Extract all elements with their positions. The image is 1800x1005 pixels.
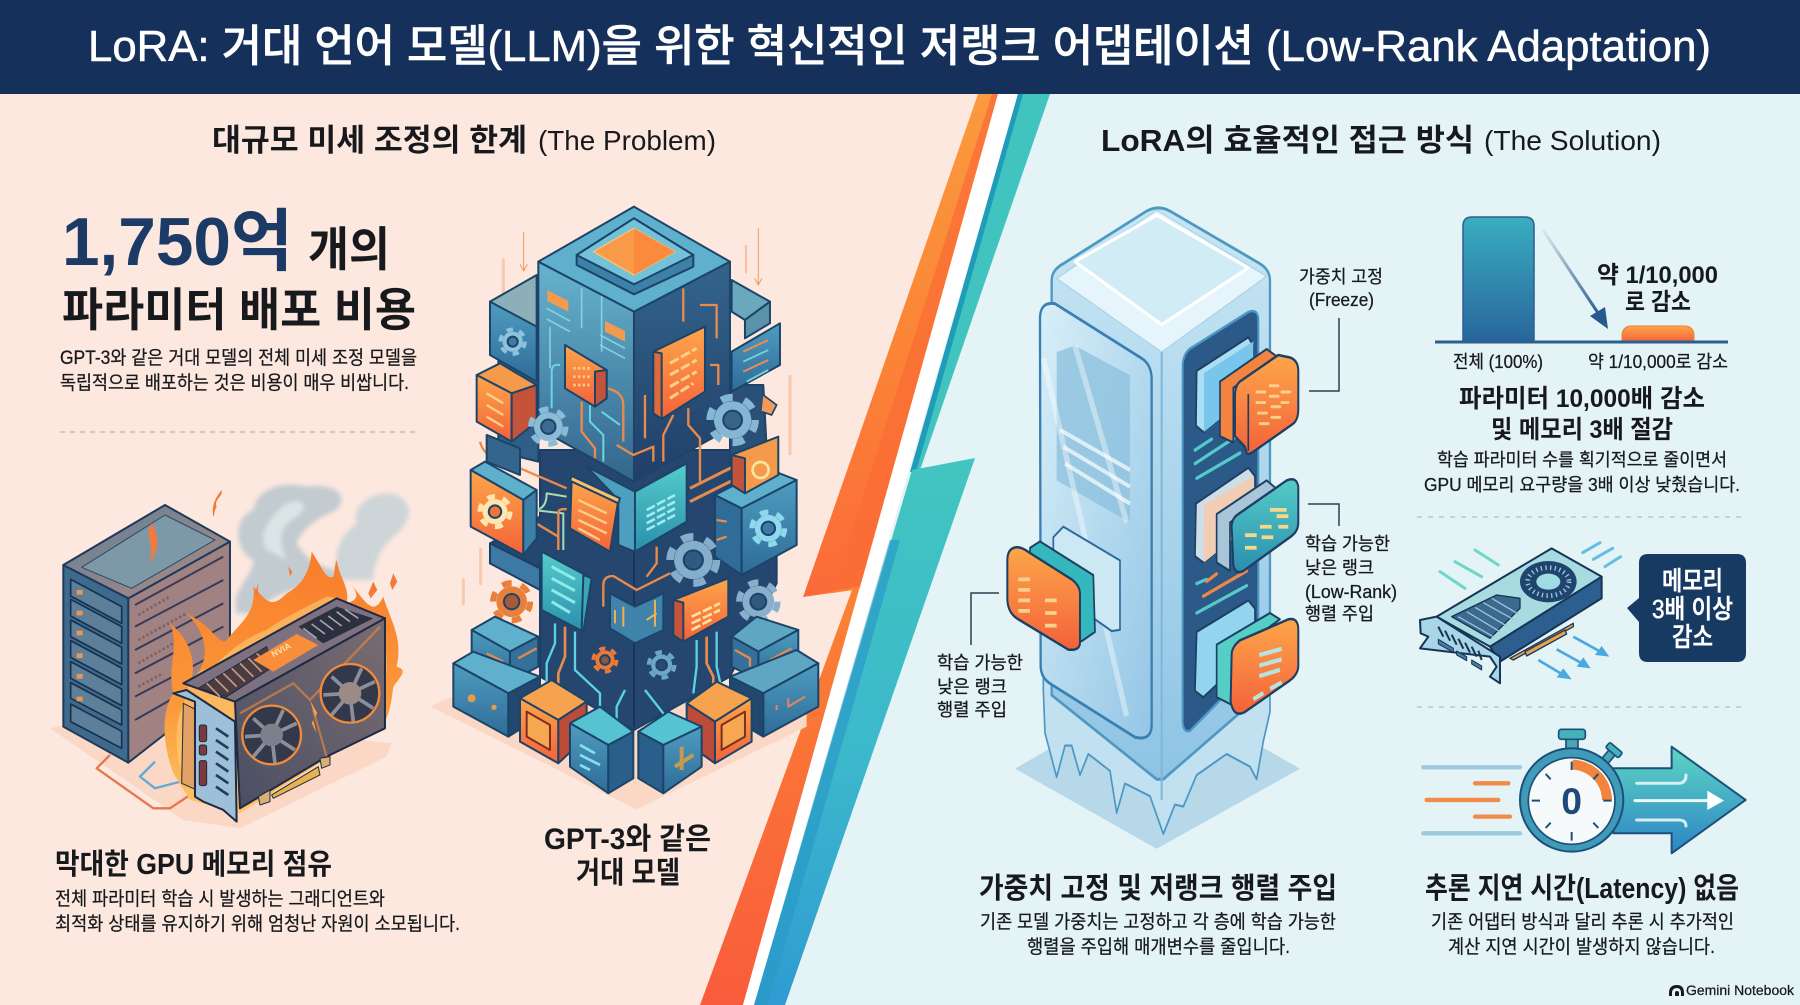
labels with leader lines: freeze and low-rank: 행렬 주입 bbox=[937, 700, 1007, 720]
text: parameter and memory reduction bbox=[1424, 385, 1740, 495]
labels with leader lines: freeze and low-rank: (Low-Rank) bbox=[1305, 582, 1397, 602]
text: weight freezing and low-rank injection: 가중치 고정 및 저랭크 행렬 주입 bbox=[979, 872, 1337, 905]
text: no inference latency bbox=[1425, 872, 1739, 958]
labels with leader lines: freeze and low-rank: 낮은 랭크 bbox=[1305, 558, 1374, 578]
text: parameter and memory reduction: GPU 메모리 요구량을 3배 이상 낮췄습니다. bbox=[1424, 475, 1740, 495]
text: GPU memory occupation bbox=[55, 848, 460, 935]
heading: solution: (The Solution) bbox=[1484, 125, 1661, 156]
labels with leader lines: freeze and low-rank bbox=[937, 267, 1397, 720]
watermark: Gemini Notebook: Gemini Notebook bbox=[1686, 982, 1795, 998]
icon: giant model tower bbox=[430, 207, 818, 809]
text: weight freezing and low-rank injection bbox=[979, 872, 1337, 958]
big number stat: 개의 bbox=[308, 223, 390, 276]
icon: frozen weight column with matrices bbox=[1007, 208, 1300, 849]
icon: cool GPU bbox=[1420, 543, 1621, 683]
caption: giant model: 거대 모델 bbox=[576, 857, 680, 890]
callout: memory reduced bbox=[1627, 554, 1746, 662]
bar chart: parameter reduction: 약 1/10,000로 감소 bbox=[1588, 352, 1728, 372]
labels with leader lines: freeze and low-rank: 학습 가능한 bbox=[1305, 534, 1390, 554]
text: deployment cost description: GPT-3와 같은 거대 모델의 전체 미세 조정 모델을 bbox=[60, 347, 417, 369]
heading: solution: LoRA의 효율적인 접근 방식 bbox=[1101, 123, 1474, 158]
text: no inference latency: 계산 지연 시간이 발생하지 않습니다. bbox=[1448, 936, 1715, 958]
panel: the problem bbox=[50, 123, 818, 935]
icon: stopwatch at zero with speed arrow: 0 bbox=[1561, 780, 1582, 822]
bar chart: parameter reduction: 전체 (100%) bbox=[1453, 352, 1543, 372]
arrow: decrease bbox=[1543, 230, 1608, 329]
panel background: right solution side bbox=[740, 90, 1800, 1005]
callout: memory reduced: 감소 bbox=[1672, 622, 1713, 652]
labels with leader lines: freeze and low-rank: 가중치 고정 bbox=[1299, 267, 1383, 287]
labels with leader lines: freeze and low-rank: 행렬 주입 bbox=[1305, 604, 1374, 624]
caption: giant model bbox=[544, 823, 711, 890]
text: deployment cost description bbox=[60, 347, 417, 394]
panel background: left problem side bbox=[0, 90, 1000, 1005]
text: deployment cost description: 독립적으로 배포하는 것은 비용이 매우 비쌉니다. bbox=[60, 372, 409, 394]
icon: burning server and GPU: NVIA bbox=[270, 640, 293, 659]
panel: the solution bbox=[937, 123, 1795, 998]
labels with leader lines: freeze and low-rank: 낮은 랭크 bbox=[937, 677, 1007, 697]
heading: problem bbox=[212, 123, 716, 158]
text: GPU memory occupation: 막대한 GPU 메모리 점유 bbox=[55, 848, 332, 881]
heading: solution bbox=[1101, 123, 1661, 158]
big number stat bbox=[62, 204, 416, 336]
text: no inference latency: 추론 지연 시간(Latency) 없음 bbox=[1425, 872, 1739, 905]
text: parameter and memory reduction: 학습 파라미터 수를 획기적으로 줄이면서 bbox=[1437, 450, 1727, 470]
labels with leader lines: freeze and low-rank: 학습 가능한 bbox=[937, 653, 1023, 673]
text: parameter and memory reduction: 및 메모리 3배 절감 bbox=[1491, 416, 1673, 444]
callout: memory reduced: 메모리 bbox=[1662, 566, 1723, 596]
diagonal lightning divider bbox=[700, 94, 1050, 1005]
bar chart: parameter reduction: 약 1/10,000 bbox=[1597, 262, 1718, 289]
text: weight freezing and low-rank injection: 행렬을 주입해 매개변수를 줄입니다. bbox=[1027, 936, 1290, 958]
text: GPU memory occupation: 최적화 상태를 유지하기 위해 엄청난 자원이 소모됩니다. bbox=[55, 913, 460, 935]
callout: memory reduced: 3배 이상 bbox=[1652, 594, 1733, 624]
caption: giant model: GPT-3와 같은 bbox=[544, 823, 711, 856]
text: no inference latency: 기존 어댑터 방식과 달리 추론 시 추가적인 bbox=[1431, 911, 1734, 933]
text: parameter and memory reduction: 파라미터 10,000배 감소 bbox=[1459, 385, 1705, 413]
text: GPU memory occupation: 전체 파라미터 학습 시 발생하는 그래디언트와 bbox=[55, 888, 385, 910]
big number stat: 파라미터 배포 비용 bbox=[62, 284, 416, 336]
big number stat: 1,750억 bbox=[62, 204, 293, 280]
heading: problem: (The Problem) bbox=[538, 125, 716, 156]
heading: problem: 대규모 미세 조정의 한계 bbox=[212, 123, 527, 158]
bar chart: parameter reduction: 로 감소 bbox=[1625, 289, 1691, 316]
icon: stopwatch at zero with speed arrow bbox=[1423, 729, 1746, 853]
labels with leader lines: freeze and low-rank: (Freeze) bbox=[1309, 290, 1374, 310]
text: weight freezing and low-rank injection: 기존 모델 가중치는 고정하고 각 층에 학습 가능한 bbox=[980, 911, 1336, 933]
header band with title bbox=[0, 0, 1800, 94]
icon: burning server and GPU bbox=[50, 485, 409, 828]
bar chart: parameter reduction bbox=[1435, 217, 1728, 372]
header band with title: LoRA: 거대 언어 모델(LLM)을 위한 혁신적인 저랭크 어댑테이션 (Low-Rank Adaptation) bbox=[88, 22, 1711, 71]
